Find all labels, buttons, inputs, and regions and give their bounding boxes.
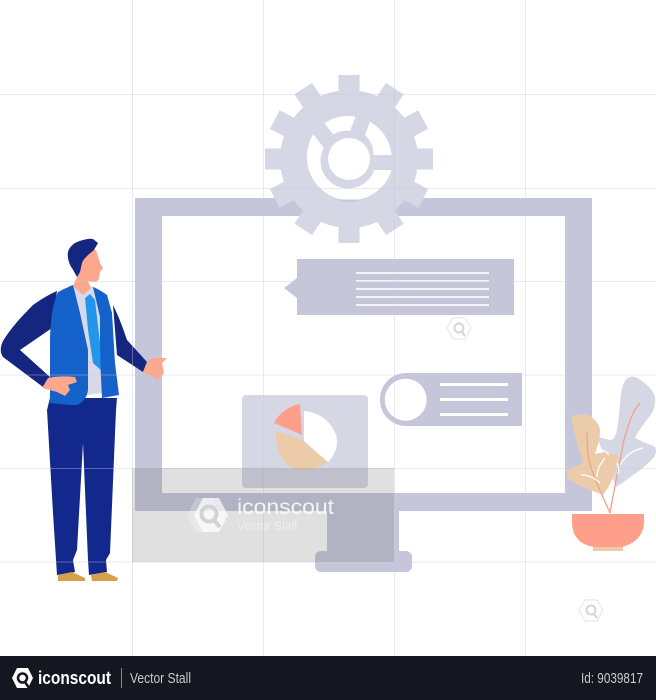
small watermark icon <box>447 318 471 339</box>
icon: gear <box>265 75 433 243</box>
footer bar <box>0 656 656 700</box>
watermark text: iconscout <box>237 496 334 519</box>
footer author: Vector Stall <box>130 670 191 687</box>
watermark text <box>237 496 334 533</box>
small watermark icon <box>579 600 603 621</box>
profile card <box>380 373 522 426</box>
watermark panel <box>132 468 394 562</box>
person <box>1 239 167 581</box>
pie chart card <box>242 395 368 488</box>
shoes <box>58 572 118 581</box>
icon: iconscout logo <box>12 668 33 688</box>
tie <box>85 294 101 370</box>
watermark text: Vector Stall <box>237 518 297 533</box>
footer brand: iconscout <box>38 668 111 688</box>
shirt <box>73 285 102 395</box>
plant <box>567 377 656 551</box>
trousers <box>47 398 117 575</box>
hair <box>68 239 98 277</box>
monitor <box>135 198 592 572</box>
hands <box>42 358 167 396</box>
sleeves <box>1 291 147 387</box>
vest <box>50 285 119 405</box>
speech box with text lines <box>284 259 514 315</box>
watermark logo <box>187 498 228 532</box>
neck and face <box>73 250 103 295</box>
